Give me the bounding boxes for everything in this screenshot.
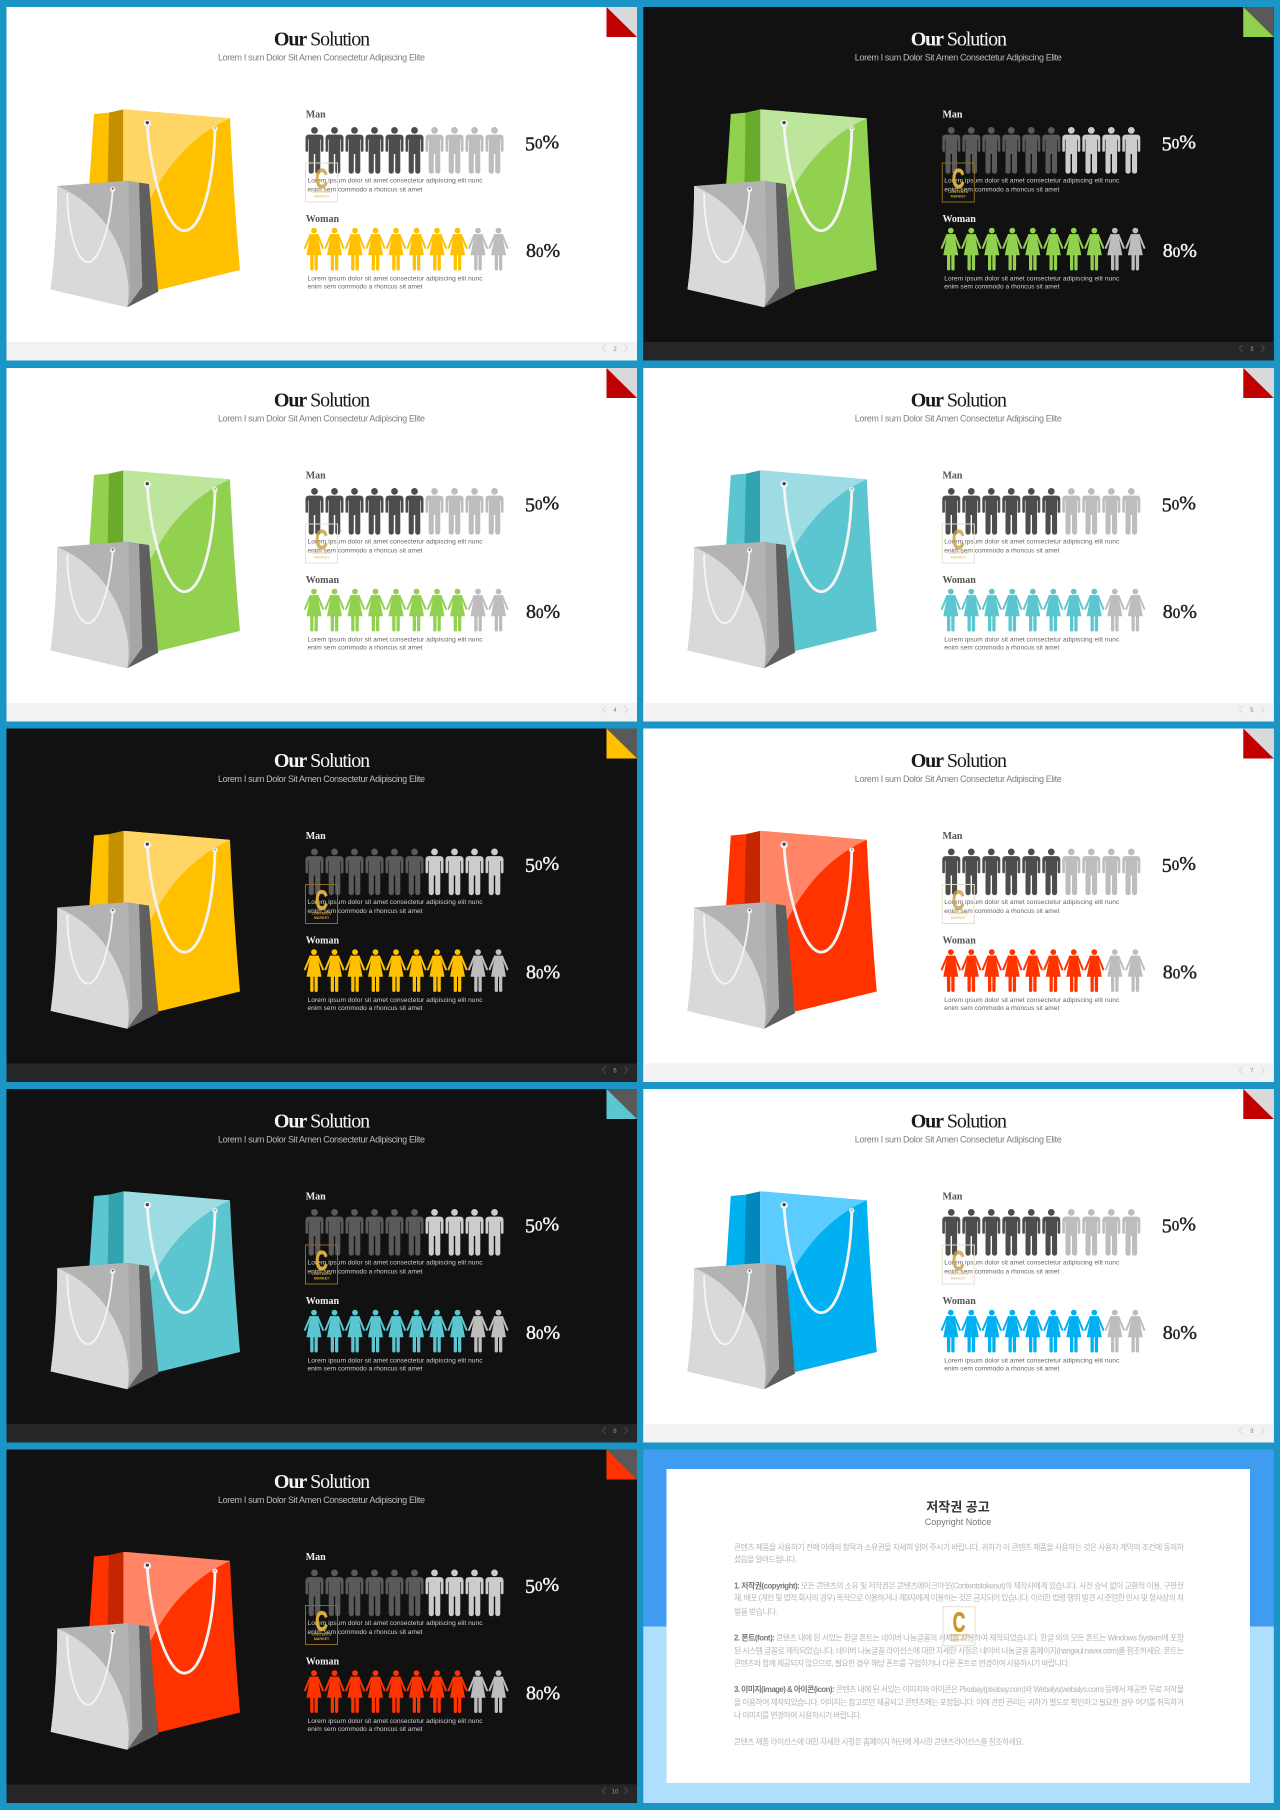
panel: slide 6 yellow on black (6, 728, 637, 1082)
text: woman description (308, 1718, 483, 1733)
text: woman description: enim sem commodo a rhoncus sit amet (308, 645, 423, 652)
icon: shopping bags (51, 1552, 240, 1750)
percentage: man: 5 (1162, 855, 1172, 877)
percentage: man: 5 (525, 1216, 535, 1238)
text: woman description (944, 1357, 1120, 1373)
text: woman description: Lorem ipsum dolor sit amet consectetur adipiscing elit nunc (308, 636, 483, 643)
pictogram row: woman 80% (305, 589, 508, 632)
text: man description (308, 1260, 483, 1276)
percentage: woman: 80% (1163, 601, 1197, 623)
pagination (1239, 1427, 1264, 1435)
text: woman description: enim sem commodo a rhoncus sit amet (308, 284, 423, 291)
text: woman description: enim sem commodo a rhoncus sit amet (944, 645, 1059, 652)
subtitle: Lorem I sum Dolor Sit Amen Consectetur Adipiscing Elite (218, 413, 425, 423)
percentage: woman: 80% (526, 601, 560, 623)
text: man description: enim sem commodo a rhoncus sit amet (944, 548, 1059, 555)
pagination (602, 345, 628, 353)
percentage: man: % (542, 1574, 559, 1596)
pictogram row: woman 80% (305, 1670, 508, 1713)
copyright heading: 저작권 공고 (926, 1500, 990, 1515)
text: man description (308, 1620, 483, 1636)
icon: shopping bags (687, 470, 877, 668)
copyright body text: 나 이미지를 변경하여 사용하시기 바랍니다. (734, 1710, 862, 1720)
percentage: woman: 80% (1163, 962, 1197, 984)
pagination (1239, 345, 1264, 353)
text: woman description: Lorem ipsum dolor sit amet consectetur adipiscing elit nunc (944, 275, 1120, 282)
watermark: C (315, 163, 328, 194)
watermark (942, 163, 974, 202)
title: Our Solution (274, 1471, 370, 1493)
watermark: C (315, 1245, 328, 1276)
subtitle: Lorem I sum Dolor Sit Amen Consectetur Adipiscing Elite (218, 52, 425, 62)
pictogram row: woman 80% (305, 949, 508, 992)
text: man description: enim sem commodo a rhoncus sit amet (308, 548, 423, 555)
label: man: Man (306, 1192, 326, 1202)
watermark (306, 1605, 338, 1644)
watermark: MARKET (314, 916, 330, 920)
copyright body text: 재, 배포 (개인 및 법적 회사의 경우) 목적으로 이용하거나 제3자에게 이용하는 것은 금지되어 있습니다. 이러한 법령 행위 발견 시 준엄한 민사 및 형사상의 처 (734, 1592, 1184, 1602)
text: woman description: Lorem ipsum dolor sit amet consectetur adipiscing elit nunc (944, 997, 1120, 1004)
text: woman description: enim sem commodo a rhoncus sit amet (944, 1366, 1059, 1373)
text: man description: Lorem ipsum dolor sit amet consectetur adipiscing elit nunc (308, 178, 483, 185)
label: woman: Woman (942, 936, 976, 946)
text: woman description: enim sem commodo a rhoncus sit amet (308, 1005, 423, 1012)
pictogram row: woman 80% (305, 1310, 508, 1353)
watermark: C (952, 1245, 965, 1276)
text: man description: Lorem ipsum dolor sit amet consectetur adipiscing elit nunc (308, 1620, 483, 1627)
text: man description: enim sem commodo a rhoncus sit amet (308, 1269, 423, 1276)
watermark: MARKET (951, 916, 967, 920)
percentage: man: 5 (525, 134, 535, 156)
percentage: man: 0 (1172, 1218, 1179, 1234)
pictogram row: woman 80% (305, 228, 508, 271)
watermark: C (952, 524, 965, 555)
percentage: woman: 80% (526, 962, 560, 984)
text: man description: enim sem commodo a rhoncus sit amet (308, 187, 423, 194)
watermark: CONTENTS (949, 1634, 969, 1638)
percentage: woman: 80% (1163, 1322, 1197, 1344)
percentage: man: % (1179, 853, 1196, 875)
percentage: man: 5 (1162, 1216, 1172, 1238)
watermark: CONTENTS (948, 912, 969, 916)
panel: slide 9 blue on white (643, 1089, 1274, 1442)
copyright body text: 셨음을 알려드립니다. (734, 1554, 797, 1564)
percentage: woman: 80% (526, 1682, 560, 1704)
percentage: woman: 80% (526, 1322, 560, 1344)
text: woman description (944, 636, 1120, 652)
watermark: MARKET (951, 194, 967, 198)
title: Our Solution (911, 750, 1007, 772)
icon: shopping bags (51, 470, 240, 668)
label: woman: Woman (942, 575, 976, 586)
percentage: man: 0 (1172, 498, 1179, 514)
label: woman: Woman (306, 936, 339, 946)
pictogram row: man 50% (942, 127, 1140, 174)
title: Our Solution (274, 1110, 370, 1132)
label: man: Man (942, 110, 963, 120)
pagination (602, 1788, 628, 1796)
watermark (942, 524, 974, 563)
text: woman description (944, 997, 1120, 1012)
text: man description: Lorem ipsum dolor sit amet consectetur adipiscing elit nunc (944, 899, 1120, 906)
text: man description: Lorem ipsum dolor sit amet consectetur adipiscing elit nunc (944, 1260, 1120, 1267)
copyright subheading: Copyright Notice (925, 1517, 991, 1527)
percentage: man: % (1179, 492, 1196, 514)
text: woman description (308, 1357, 483, 1373)
pagination (1239, 1066, 1264, 1074)
pictogram row: woman 80% (942, 949, 1144, 992)
icon: shopping bags (51, 1191, 240, 1389)
subtitle: Lorem I sum Dolor Sit Amen Consectetur Adipiscing Elite (855, 52, 1062, 62)
copyright body text: 벌을 받습니다. (734, 1606, 778, 1616)
percentage: man: 0 (1172, 136, 1179, 152)
watermark: MARKET (314, 556, 330, 560)
title: Our Solution (274, 390, 370, 412)
text: man description: Lorem ipsum dolor sit amet consectetur adipiscing elit nunc (308, 899, 483, 906)
percentage: man: % (542, 492, 559, 514)
watermark: C (953, 1606, 965, 1638)
watermark (942, 884, 974, 924)
corner tab (1243, 7, 1274, 37)
text: woman description: enim sem commodo a rhoncus sit amet (944, 1005, 1059, 1012)
label: woman: Woman (306, 1656, 339, 1668)
label: man: Man (942, 831, 963, 842)
watermark: C (952, 163, 965, 194)
pictogram row: man 50% (942, 848, 1140, 895)
watermark: MARKET (314, 1637, 330, 1641)
corner tab (1243, 1089, 1274, 1119)
text: woman description: enim sem commodo a rhoncus sit amet (308, 1726, 423, 1733)
label: woman: Woman (942, 1296, 976, 1307)
pagination: 9 (1250, 1429, 1254, 1435)
pagination: 4 (613, 708, 617, 714)
text: man description: Lorem ipsum dolor sit amet consectetur adipiscing elit nunc (308, 1260, 483, 1267)
pictogram row: man 50% (306, 488, 504, 535)
text: man description (944, 899, 1120, 915)
label: man: Man (306, 831, 326, 842)
panel: slide 5 teal on white (643, 368, 1274, 722)
text: man description (944, 178, 1120, 194)
label: man: Man (306, 1552, 326, 1563)
copyright body text: 3. 이미지(image) & 아이콘(icon): 콘텐츠 내에 된 서있는 이미지와 아이콘은 Pixabay(pixabay.com)와 Webalys(webalys.com) 등에서 제공한 무료 저작물 (734, 1684, 1184, 1694)
watermark (306, 1245, 338, 1284)
text: man description: Lorem ipsum dolor sit amet consectetur adipiscing elit nunc (944, 178, 1120, 185)
copyright body text: 1. 저작권(copyright): 모든 콘텐츠의 소유 및 저작권은 콘텐츠메이크아웃(Contentstokeout)의 제작사에게 있습니다. 사전 승낙 없이 교환적 이용, 구판전 (734, 1580, 1184, 1590)
corner tab (606, 7, 637, 37)
text: man description (308, 539, 483, 555)
copyright body text: 된 시스템 글꼴로 제작되었습니다. 네이버 나눔글꼴 라이선스에 대한 자세한 사항은 네이버 나눔글꼴 홈페이지(hangeul.naver.com)를 참조하세요. 폰트는 (734, 1646, 1184, 1656)
copyright body text: 을 이용하여 제작되었습니다. 이미지는 참고로만 제공되고 콘텐츠에는 포함됩니다. 이에 관한 권리는 귀하가 별도로 확인하고 필요한 경우 여기를 취득하거 (734, 1697, 1184, 1707)
label: woman: Woman (306, 1296, 339, 1307)
pictogram row: man 50% (306, 1209, 504, 1256)
percentage: man: % (542, 853, 559, 875)
watermark: C (315, 884, 328, 916)
text: woman description (944, 275, 1120, 291)
panel: slide 3 green on black (643, 7, 1274, 360)
percentage: man: 5 (525, 1576, 535, 1598)
watermark: CONTENTS (948, 551, 969, 555)
text: man description (308, 178, 483, 194)
watermark: C (315, 1605, 328, 1637)
percentage: man: % (1179, 132, 1196, 154)
watermark: CONTENTS (312, 1272, 332, 1276)
watermark (306, 884, 338, 924)
copyright body text: 콘텐츠와 함께 제공되지 않으므로, 필요한 경우 해당 폰트를 구입하거나 다른 폰트로 변경하여 사용하시기 바랍니다. (734, 1658, 1070, 1668)
percentage: man: % (542, 132, 559, 154)
label: man: Man (306, 110, 326, 120)
copyright body text (734, 1542, 1184, 1746)
text: man description: enim sem commodo a rhoncus sit amet (944, 187, 1059, 194)
pagination: 10 (612, 1790, 619, 1796)
icon: shopping bags (687, 831, 877, 1029)
watermark: MARKET (314, 1276, 330, 1280)
watermark: CONTENTS (312, 1632, 332, 1636)
percentage: man: % (542, 1214, 559, 1236)
text: man description: enim sem commodo a rhoncus sit amet (308, 1629, 423, 1636)
percentage: man: 5 (1162, 494, 1172, 516)
percentage: man: 5 (525, 494, 535, 516)
subtitle: Lorem I sum Dolor Sit Amen Consectetur Adipiscing Elite (855, 1134, 1062, 1144)
panel: slide 7 red on white (643, 728, 1274, 1082)
title: Our Solution (274, 750, 370, 772)
pagination: 5 (1250, 708, 1254, 714)
text: woman description: Lorem ipsum dolor sit amet consectetur adipiscing elit nunc (944, 1357, 1120, 1364)
copyright body text: 콘텐츠 제품을 사용하기 전에 아래의 항목과 소유권을 자세히 읽어 주시기 바랍니다. 귀하가 이 콘텐츠 제품을 사용하는 것은 사용자 계약의 조건에 동의하 (734, 1542, 1184, 1552)
watermark: MARKET (951, 556, 967, 560)
subtitle: Lorem I sum Dolor Sit Amen Consectetur Adipiscing Elite (855, 413, 1062, 423)
label: man: Man (306, 470, 326, 482)
text: woman description: Lorem ipsum dolor sit amet consectetur adipiscing elit nunc (308, 997, 483, 1004)
title: Our Solution (911, 1110, 1007, 1132)
watermark: C (952, 884, 965, 916)
pagination (602, 706, 628, 714)
copyright body text: 콘텐츠 제품 라이선스에 대한 자세한 사항은 홈페이지 하단에 게시한 콘텐츠라이선스를 참조하세요. (734, 1736, 1024, 1746)
percentage: man: 5 (525, 855, 535, 877)
corner tab (606, 728, 637, 758)
pictogram row: man 50% (942, 488, 1140, 535)
label: man: Man (942, 470, 963, 482)
watermark (306, 524, 338, 563)
pagination: 6 (613, 1068, 617, 1074)
pictogram row: woman 80% (942, 228, 1144, 271)
text: man description: Lorem ipsum dolor sit amet consectetur adipiscing elit nunc (944, 539, 1120, 546)
percentage: woman: 80% (526, 240, 560, 262)
pictogram row: man 50% (306, 848, 504, 895)
percentage: man: 0 (535, 498, 542, 514)
percentage: man: 5 (1162, 134, 1172, 156)
panel: copyright notice slide (643, 1450, 1274, 1803)
title: Our Solution (911, 390, 1007, 412)
pictogram row: woman 80% (942, 1310, 1144, 1353)
icon: shopping bags (51, 831, 240, 1029)
panel: slide 4 green on white (6, 368, 637, 722)
watermark: MARKET (951, 1638, 967, 1642)
icon: shopping bags (687, 109, 877, 307)
text: woman description: Lorem ipsum dolor sit amet consectetur adipiscing elit nunc (944, 636, 1120, 643)
pagination (602, 1427, 628, 1435)
pagination: 3 (1250, 347, 1254, 353)
watermark: CONTENTS (312, 912, 332, 916)
pagination (1239, 706, 1264, 714)
pagination: 8 (613, 1429, 617, 1435)
pictogram row: man 50% (306, 127, 504, 174)
label: woman: Woman (306, 575, 339, 586)
pictogram row: woman 80% (942, 589, 1144, 632)
label: woman: Woman (306, 214, 339, 225)
watermark: CONTENTS (948, 190, 969, 194)
watermark: C (315, 524, 328, 555)
watermark (942, 1245, 974, 1284)
icon: shopping bags (51, 109, 240, 307)
panel: slide 10 red on black (6, 1450, 637, 1803)
percentage: man: 0 (535, 1218, 542, 1234)
text: man description (944, 1260, 1120, 1276)
pagination: 7 (1250, 1068, 1254, 1074)
watermark (943, 1606, 975, 1646)
pagination: 2 (613, 347, 617, 353)
text: woman description (308, 997, 483, 1012)
percentage: man: 0 (535, 1579, 542, 1595)
text: man description: enim sem commodo a rhoncus sit amet (308, 908, 423, 915)
copyright body text: 2. 폰트(font): 콘텐츠 내에 된 서있는 한글 폰트는 네이버 나눔글꼴의 서체를 사용하여 제작되었습니다. 한글 외의 모든 폰트는 Windows System에 포함 (734, 1632, 1184, 1642)
watermark: MARKET (951, 1276, 967, 1280)
corner tab (1243, 368, 1274, 398)
icon: shopping bags (687, 1191, 877, 1389)
percentage: man: 0 (535, 136, 542, 152)
text: woman description: Lorem ipsum dolor sit amet consectetur adipiscing elit nunc (308, 275, 483, 282)
watermark: CONTENTS (312, 551, 332, 555)
percentage: woman: 80% (1163, 240, 1197, 262)
text: woman description (308, 275, 483, 291)
percentage: man: 0 (1172, 858, 1179, 874)
percentage: man: % (1179, 1214, 1196, 1236)
label: woman: Woman (942, 214, 976, 225)
watermark: MARKET (314, 194, 330, 198)
panel: slide 2 yellow on white (6, 7, 637, 360)
title: Our Solution (911, 28, 1007, 50)
percentage: man: 0 (535, 858, 542, 874)
text: woman description (308, 636, 483, 652)
subtitle: Lorem I sum Dolor Sit Amen Consectetur Adipiscing Elite (218, 774, 425, 784)
watermark: CONTENTS (948, 1272, 969, 1276)
subtitle: Lorem I sum Dolor Sit Amen Consectetur Adipiscing Elite (218, 1134, 425, 1144)
text: man description (944, 539, 1120, 555)
corner tab (1243, 728, 1274, 758)
watermark: CONTENTS (312, 190, 332, 194)
subtitle: Lorem I sum Dolor Sit Amen Consectetur Adipiscing Elite (218, 1495, 425, 1505)
text: man description: Lorem ipsum dolor sit amet consectetur adipiscing elit nunc (308, 539, 483, 546)
corner tab (606, 368, 637, 398)
pagination (602, 1066, 628, 1074)
text: man description (308, 899, 483, 915)
corner tab (606, 1450, 637, 1480)
panel: slide 8 teal on black (6, 1089, 637, 1442)
text: man description: enim sem commodo a rhoncus sit amet (944, 908, 1059, 915)
label: man: Man (942, 1192, 963, 1202)
text: woman description: enim sem commodo a rhoncus sit amet (944, 284, 1059, 291)
subtitle: Lorem I sum Dolor Sit Amen Consectetur Adipiscing Elite (855, 774, 1062, 784)
text: man description: enim sem commodo a rhoncus sit amet (944, 1269, 1059, 1276)
pictogram row: man 50% (306, 1570, 504, 1616)
watermark (306, 163, 338, 202)
corner tab (606, 1089, 637, 1119)
text: woman description: Lorem ipsum dolor sit amet consectetur adipiscing elit nunc (308, 1718, 483, 1725)
title: Our Solution (274, 28, 370, 50)
pictogram row: man 50% (942, 1209, 1140, 1256)
text: woman description: Lorem ipsum dolor sit amet consectetur adipiscing elit nunc (308, 1357, 483, 1364)
text: woman description: enim sem commodo a rhoncus sit amet (308, 1366, 423, 1373)
